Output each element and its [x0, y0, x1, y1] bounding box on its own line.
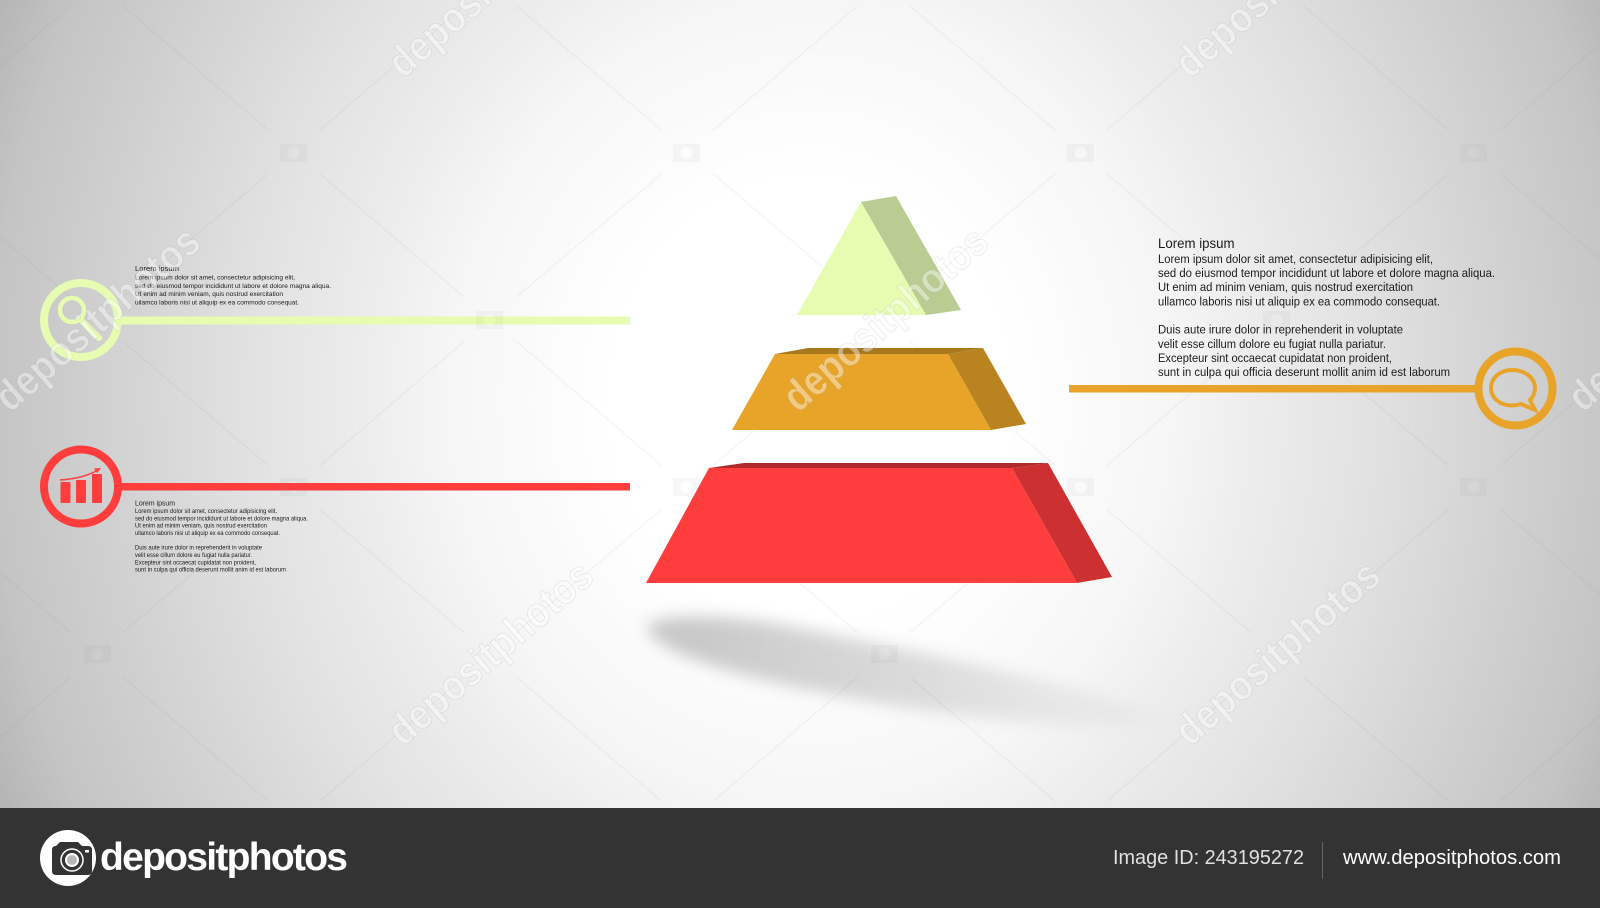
text block: green callout: Lorem ipsum — [135, 264, 179, 273]
text block: red callout: velit esse cillum dolore eu fugiat nulla pariatur. — [135, 552, 252, 559]
text block: orange callout: sed do eiusmod tempor incididunt ut labore et dolore magna aliqua. — [1158, 266, 1495, 280]
watermark texts: depositphotos — [773, 217, 997, 420]
text block: red callout: Lorem ipsum — [135, 498, 175, 508]
text block: orange callout: Lorem ipsum — [1158, 236, 1234, 251]
text block: orange callout: ullamco laboris nisi ut aliquip ex ea commodo consequat. — [1158, 294, 1440, 308]
footer website: www.depositphotos.com — [1342, 847, 1561, 869]
text block: green callout: Ut enim ad minim veniam, quis nostrud exercitation — [135, 291, 283, 298]
text block: red callout: Duis aute irure dolor in reprehenderit in voluptate — [135, 544, 262, 552]
text block: orange callout: Excepteur sint occaecat cupidatat non proident, — [1158, 351, 1392, 365]
floor shadow — [646, 617, 1185, 724]
text block: orange callout: velit esse cillum dolore eu fugiat nulla pariatur. — [1158, 337, 1386, 351]
footer logo wordmark: depositphotos — [100, 836, 348, 879]
text block: red callout: Excepteur sint occaecat cupidatat non proident, — [135, 560, 256, 566]
callout: red connector line — [120, 483, 630, 490]
text block: red callout: Ut enim ad minim veniam, quis nostrud exercitation — [135, 522, 267, 530]
footer image id: Image ID: 243195272 — [1113, 847, 1304, 869]
watermark texts: depositphotos — [378, 551, 602, 754]
text block: green callout: Lorem ipsum dolor sit amet, consectetur adipisicing elit, — [135, 274, 295, 282]
footer bar — [0, 808, 1600, 908]
text block: green callout: ullamco laboris nisi ut aliquip ex ea commodo consequat. — [135, 300, 299, 306]
text block: red callout — [135, 498, 308, 574]
text block: red callout: sed do eiusmod tempor incididunt ut labore et dolore magna aliqua. — [135, 516, 308, 522]
text block: orange callout: Duis aute irure dolor in reprehenderit in voluptate — [1158, 322, 1403, 336]
footer divider — [1322, 842, 1323, 879]
callout: red circle with bar chart icon — [44, 450, 118, 524]
callout: orange connector line — [1069, 385, 1481, 392]
footer logo icon: camera — [40, 830, 96, 886]
callout: green circle with magnifier icon — [44, 283, 118, 357]
text block: red callout: ullamco laboris nisi ut aliquip ex ea commodo consequat. — [135, 530, 280, 537]
text block: green callout — [135, 264, 331, 306]
pyramid — [646, 196, 1112, 583]
pyramid tier: bottom red — [646, 463, 1112, 583]
pyramid tier: top green — [797, 196, 961, 315]
pyramid tier: middle orange — [732, 348, 1026, 430]
text block: red callout: sunt in culpa qui officia deserunt mollit anim id est laborum — [135, 566, 286, 574]
callout: green connector line — [120, 316, 630, 324]
text block: orange callout: Lorem ipsum dolor sit amet, consectetur adipisicing elit, — [1158, 252, 1433, 266]
watermark texts: depositphotos — [1165, 551, 1389, 754]
text block: green callout: sed do eiusmod tempor incididunt ut labore et dolore magna aliqua. — [135, 283, 331, 290]
text block: orange callout — [1158, 236, 1495, 379]
text block: orange callout: Ut enim ad minim veniam, quis nostrud exercitation — [1158, 280, 1413, 294]
watermark camera marks — [84, 144, 1487, 663]
text block: red callout: Lorem ipsum dolor sit amet, consectetur adipisicing elit, — [135, 508, 277, 515]
callout: orange circle with speech bubble icon — [1478, 352, 1552, 426]
text block: orange callout: sunt in culpa qui officia deserunt mollit anim id est laborum — [1158, 365, 1450, 379]
